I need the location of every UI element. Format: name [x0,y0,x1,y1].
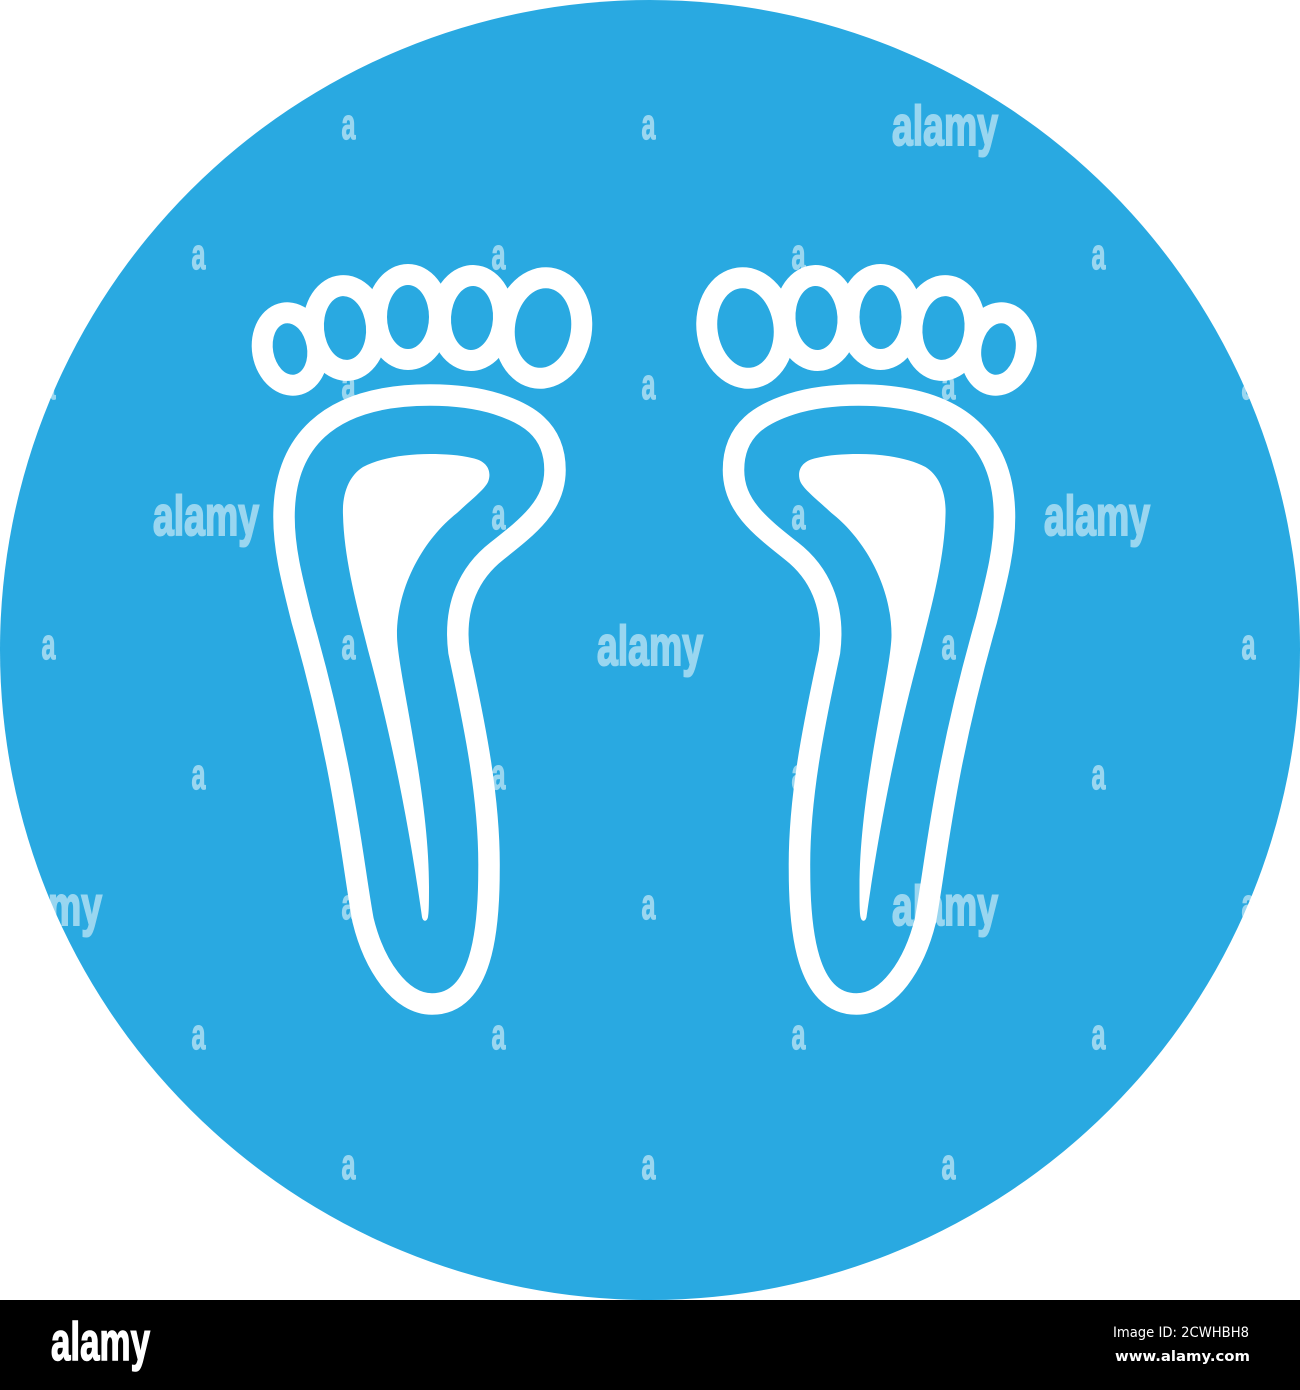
watermark: small a marks: a [1242,620,1256,669]
watermark: small a marks: a [192,1010,206,1059]
left foot outline [284,395,555,1004]
watermark: small a marks: a [192,230,206,279]
watermark: small a marks: a [792,490,806,539]
watermark: small a marks: a [1242,880,1256,929]
watermark: small a marks: a [342,1140,356,1189]
left foot toes [244,261,600,402]
watermark: small a marks: a [342,880,356,929]
watermark: small a marks: a [42,360,56,409]
watermark: small a marks: a [1092,230,1106,279]
right foot outline [734,395,1004,1004]
watermark: large alamy wordmarks: alamy [153,484,259,547]
watermark: large alamy wordmarks: alamy [0,874,102,937]
footer bar [0,1300,1300,1390]
icon: right foot [688,261,1044,1004]
watermark: small a marks: a [642,880,656,929]
watermark: small a marks: a [492,490,506,539]
watermark: large alamy wordmarks: alamy [892,874,998,937]
watermark: small a marks: a [492,230,506,279]
watermark: small a marks: a [792,230,806,279]
watermark: large alamy wordmarks: alamy [597,614,703,677]
icon: left foot [244,261,600,1004]
watermark: small a marks: a [642,100,656,149]
watermark: large alamy wordmarks: alamy [892,94,998,157]
watermark: small a marks: a [342,620,356,669]
watermark pattern [0,94,1256,1189]
watermark: small a marks: a [942,1140,956,1189]
watermark: small a marks: a [642,360,656,409]
watermark: small a marks: a [642,1140,656,1189]
left foot arch shape [343,454,489,921]
watermark: small a marks: a [342,100,356,149]
watermark: large alamy wordmarks: alamy [1044,484,1150,547]
watermark: large alamy wordmarks [0,94,1150,937]
watermark: small a marks [42,100,1256,1189]
watermark: small a marks: a [1092,750,1106,799]
watermark: small a marks: a [942,620,956,669]
right foot toes [688,261,1044,402]
watermark: small a marks: a [192,750,206,799]
image id: Image ID: 2CWHBH8 [1113,1325,1249,1341]
website url: www.alamy.com [1115,1349,1250,1365]
watermark: small a marks: a [1242,360,1256,409]
watermark: small a marks: a [792,750,806,799]
watermark: small a marks: a [342,360,356,409]
watermark: small a marks: a [942,360,956,409]
watermark: small a marks: a [792,1010,806,1059]
right foot arch shape [799,454,946,921]
watermark: small a marks: a [492,750,506,799]
watermark: small a marks: a [42,620,56,669]
watermark: small a marks: a [1092,1010,1106,1059]
footer logo: alamy [51,1312,150,1372]
watermark: small a marks: a [492,1010,506,1059]
